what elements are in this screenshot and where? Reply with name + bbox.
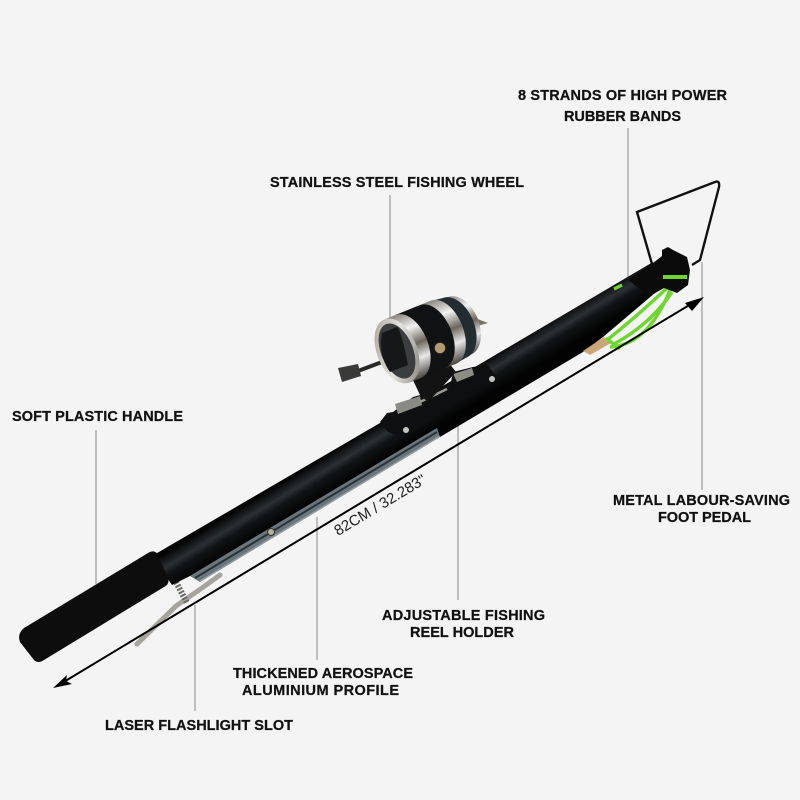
green rubber bands xyxy=(606,285,672,349)
label: flashlight slot: LASER FLASHLIGHT SLOT xyxy=(105,718,293,734)
aluminium rail xyxy=(190,426,440,582)
metal foot pedal xyxy=(637,182,719,265)
reel foot xyxy=(412,358,456,402)
screw xyxy=(268,528,274,536)
reel tail fin xyxy=(470,316,488,328)
crank handle xyxy=(338,362,382,382)
trigger lever and spring xyxy=(137,575,220,644)
dimension label: 82CM / 32.283" xyxy=(331,471,429,539)
brass tip xyxy=(583,337,611,355)
dimension arrow xyxy=(53,297,704,688)
label: reel holder: ADJUSTABLE FISHING xyxy=(382,608,545,624)
label: foot pedal: FOOT PEDAL xyxy=(658,510,751,526)
label: reel holder: REEL HOLDER xyxy=(410,625,515,641)
black tube xyxy=(152,262,662,585)
soft grip handle xyxy=(19,551,168,662)
label: handle: SOFT PLASTIC HANDLE xyxy=(12,409,183,425)
label: foot pedal: METAL LABOUR-SAVING xyxy=(613,493,790,509)
label: 8 strands: 8 STRANDS OF HIGH POWER xyxy=(518,88,728,104)
leader lines xyxy=(96,128,702,711)
label: fishing wheel: STAINLESS STEEL FISHING WHEEL xyxy=(270,175,524,191)
rod xyxy=(19,182,719,662)
label: aluminium profile: THICKENED AEROSPACE xyxy=(233,666,413,682)
green band at head xyxy=(663,275,687,279)
label: 8 strands: RUBBER BANDS xyxy=(564,109,681,125)
reel holder xyxy=(380,365,497,438)
fishing reel xyxy=(366,287,490,390)
label: aluminium profile: ALUMINIUM PROFILE xyxy=(242,683,399,699)
reel screw xyxy=(434,342,446,354)
reel knob xyxy=(381,327,408,372)
rod head xyxy=(628,247,690,296)
